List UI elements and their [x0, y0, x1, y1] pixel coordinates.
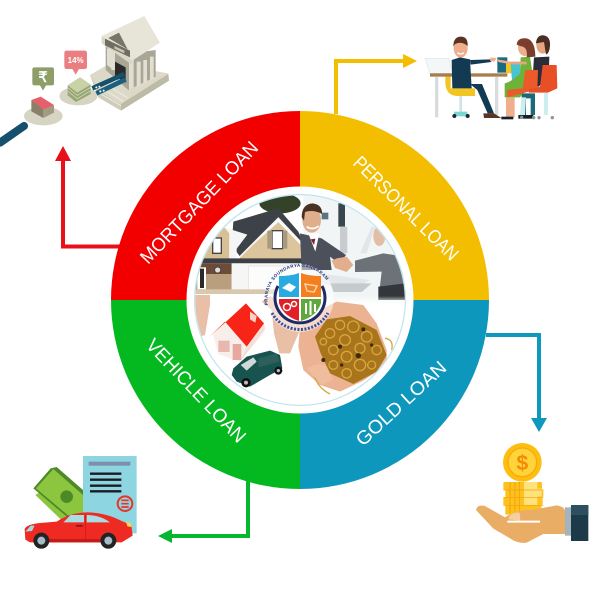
- photo: house: [193, 193, 305, 295]
- icon: car with banknotes and document: [25, 456, 137, 549]
- document: [83, 456, 137, 533]
- college crest logo: PRANAVA SOUNDARYA SANKARAM: [264, 264, 329, 306]
- car: [25, 512, 133, 542]
- photo: house model and car: [195, 294, 302, 405]
- icon: hand holding gold coins: [476, 443, 588, 543]
- icon: personal loan meeting: [425, 35, 557, 119]
- home disc: [24, 107, 63, 125]
- college crest logo: [264, 264, 334, 332]
- man client: [532, 57, 549, 87]
- segment: personal loan: [300, 111, 489, 300]
- segment: gold loan: [300, 300, 489, 489]
- photo: hands holding gold jewellery: [298, 302, 410, 410]
- connector arrow: vehicle loan: [158, 480, 250, 543]
- documents: [497, 57, 507, 73]
- dollar coin: [503, 443, 542, 482]
- tube: [0, 126, 24, 143]
- segment: vehicle loan: [111, 300, 300, 489]
- label: personal loan: PERSONAL LOAN: [348, 153, 462, 265]
- label: gold loan: GOLD LOAN: [352, 358, 451, 451]
- chair: [445, 77, 475, 96]
- hand: [476, 505, 565, 543]
- icon: bank with mortgage money flow: 14%: [68, 56, 84, 65]
- label: mortgage loan: MORTGAGE LOAN: [136, 138, 263, 268]
- bank building: [90, 16, 169, 111]
- connector arrow: personal loan: [334, 54, 417, 114]
- connector arrow: gold loan: [486, 333, 547, 432]
- money disc: [59, 87, 97, 105]
- orange chairs: [507, 70, 538, 97]
- icon: bank with mortgage money flow: [0, 16, 169, 143]
- banknotes: [35, 492, 83, 527]
- center circular photo collage: [190, 193, 410, 411]
- coin stack: [503, 482, 543, 515]
- woman client: [505, 57, 532, 97]
- shirt cuff: [565, 507, 571, 536]
- wheels: [33, 533, 49, 549]
- segment: mortgage loan: [111, 111, 300, 300]
- laptop: [425, 58, 453, 73]
- photo: business handshake: [300, 193, 410, 304]
- icon: hand holding gold coins: $: [516, 451, 528, 475]
- sleeve: [571, 505, 588, 541]
- connector arrow: mortgage loan: [55, 146, 122, 248]
- donut ring with four loan segments: [111, 111, 489, 489]
- percent bubble: [64, 51, 87, 75]
- label: vehicle loan: VEHICLE LOAN: [141, 335, 250, 447]
- icon: bank with mortgage money flow: ₹: [38, 70, 48, 86]
- rupee bubble: [32, 67, 54, 91]
- desk: [430, 73, 507, 77]
- consultant: [452, 57, 472, 88]
